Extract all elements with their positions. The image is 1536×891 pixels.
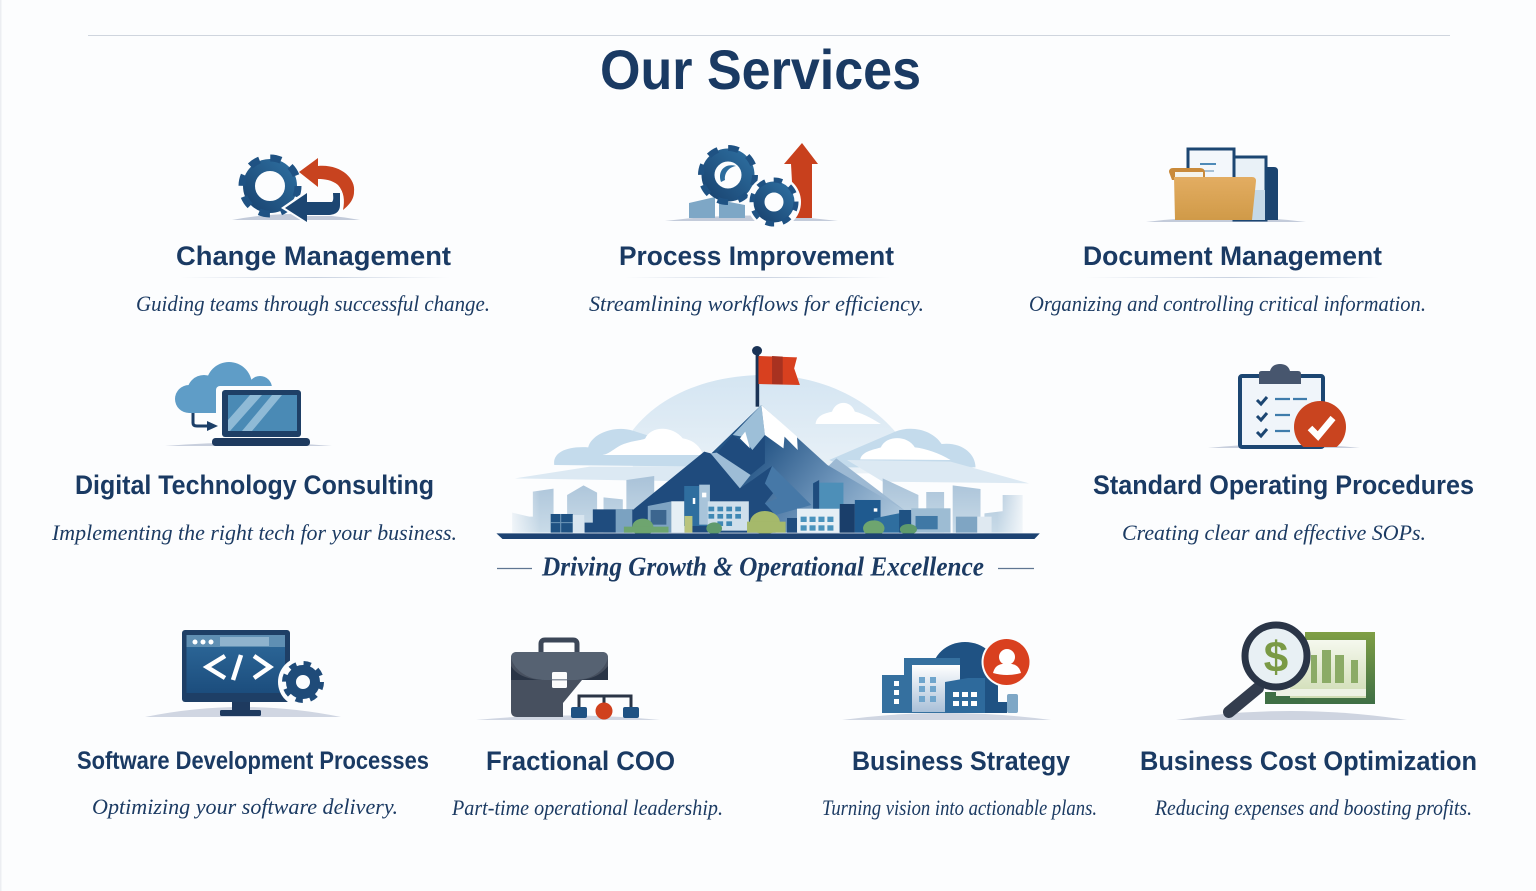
description: Creating clear and effective SOPs.: [1122, 520, 1426, 545]
icon: folder with documents: [1146, 149, 1306, 222]
panel: Document Management: [1029, 149, 1426, 316]
heading: Change Management: [176, 241, 451, 271]
icon: magnifier with dollar and bar chart: [1176, 625, 1407, 720]
icon: monitor with code and gear: [145, 630, 341, 717]
heading: Business Strategy: [852, 746, 1070, 776]
icon: gears, bars and up arrow: [665, 143, 838, 229]
description: Turning vision into actionable plans.: [822, 795, 1097, 820]
icon: clipboard with check badge: [1208, 364, 1360, 453]
panel: Digital Technology Consulting: [51, 362, 457, 545]
mountain scene: [496, 346, 1040, 539]
panel: Software Development Processes: [77, 630, 429, 819]
icon: briefcase with org chart: [476, 640, 660, 720]
heading: Process Improvement: [619, 241, 894, 271]
icon: magnifier with dollar and bar chart: $: [1264, 633, 1288, 682]
description: Optimizing your software delivery.: [92, 794, 398, 819]
description: Implementing the right tech for your business.: [51, 520, 457, 545]
description: Guiding teams through successful change.: [136, 291, 490, 316]
heading: Fractional COO: [486, 746, 675, 776]
panel: Change Management: [136, 158, 490, 316]
description: Streamlining workflows for efficiency.: [589, 291, 924, 316]
city buildings: [551, 480, 992, 533]
heading: Digital Technology Consulting: [75, 470, 434, 500]
trees: [624, 511, 917, 536]
heading: Business Cost Optimization: [1140, 746, 1477, 776]
heading: Standard Operating Procedures: [1093, 470, 1474, 500]
description: Reducing expenses and boosting profits.: [1154, 795, 1472, 820]
panel: Business Strategy: [822, 637, 1097, 820]
title: Our Services: [600, 38, 921, 101]
description: Organizing and controlling critical information.: [1029, 291, 1426, 316]
heading: Software Development Processes: [77, 747, 429, 775]
icon: buildings and person badge: [842, 637, 1051, 720]
icon: gear with change arrows: [232, 158, 360, 224]
panel: Business Cost Optimization: [1140, 625, 1477, 820]
panel: Fractional COO: [451, 640, 723, 820]
icon: cloud and laptop: [165, 362, 332, 446]
tagline: Driving Growth & Operational Excellence: [541, 552, 984, 582]
central illustration: mountain and city: [496, 346, 1040, 582]
panel: Process Improvement: [589, 143, 924, 316]
heading: Document Management: [1083, 241, 1382, 271]
description: Part-time operational leadership.: [451, 795, 723, 820]
panel: Standard Operating Procedures: [1093, 364, 1474, 545]
